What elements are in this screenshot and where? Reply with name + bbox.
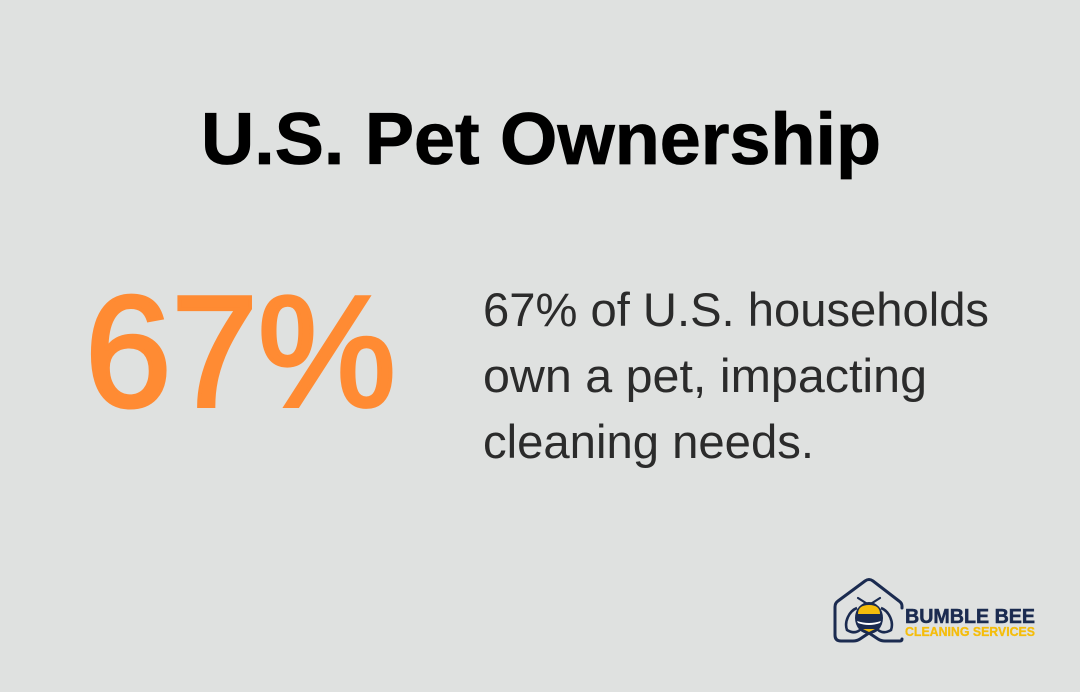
title: U.S. Pet Ownership [201, 99, 881, 180]
logo wordmark: BUMBLE BEE [905, 606, 1035, 628]
icon: house outline [835, 580, 902, 641]
description text [483, 283, 989, 468]
description text: 67% of U.S. households [483, 283, 989, 336]
icon: bee [846, 598, 892, 634]
big statistic: 67% [85, 264, 396, 440]
description text: own a pet, impacting [483, 349, 927, 402]
description text: cleaning needs. [483, 415, 814, 468]
logo: Bumble Bee Cleaning Services [835, 580, 1035, 641]
logo tagline: CLEANING SERVICES [905, 625, 1035, 639]
